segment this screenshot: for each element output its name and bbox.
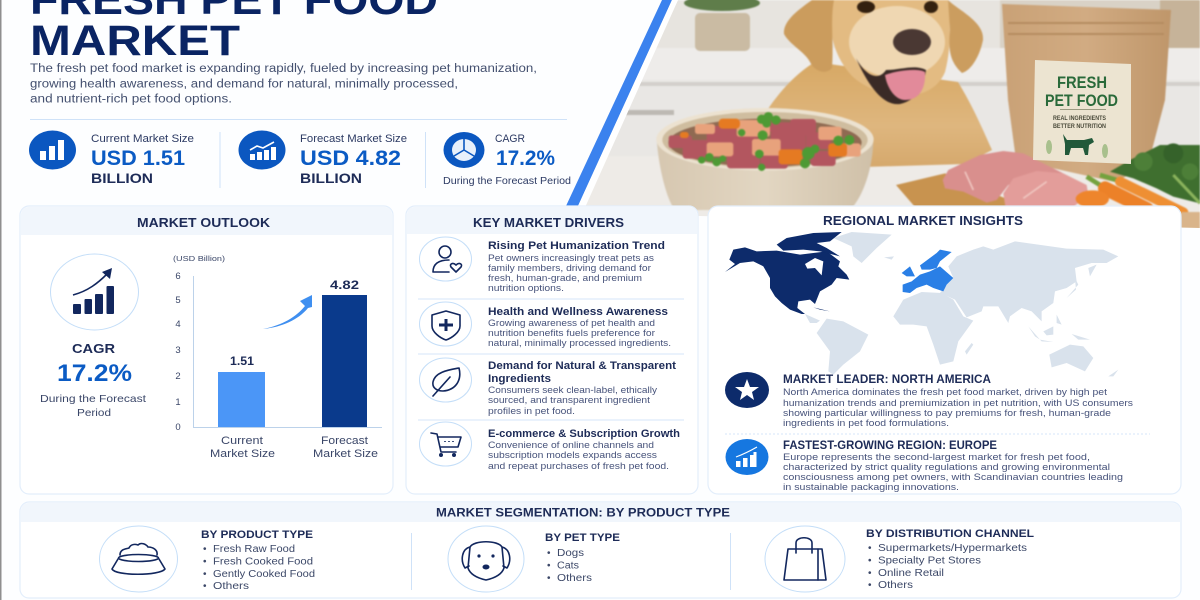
food chunks <box>668 112 862 171</box>
stat: forecast market size: Forecast Market Size <box>300 133 407 145</box>
bar chart: market size: Market Size <box>210 448 275 460</box>
icon: rising chart <box>238 130 286 170</box>
segment: distribution channel: • <box>868 580 872 591</box>
segment: pet type: • <box>547 573 551 584</box>
segment: pet type: BY PET TYPE <box>545 532 620 544</box>
stat: CAGR: CAGR <box>495 133 525 145</box>
driver: health and wellness: natural, minimally processed ingredients. <box>488 338 671 349</box>
segment: distribution channel <box>765 526 1034 592</box>
title <box>30 0 438 65</box>
bar chart: market size: Market Size <box>313 448 378 460</box>
heading: key market drivers: KEY MARKET DRIVERS <box>473 215 624 230</box>
icon: person with heart <box>420 237 472 281</box>
diagonal white and blue stripe <box>566 0 678 212</box>
panel: market outlook <box>20 206 393 494</box>
arrow: growth <box>263 295 312 329</box>
icon: rising bars <box>726 439 768 475</box>
panel: market segmentation <box>20 502 1181 598</box>
panel: regional market insights <box>708 206 1181 494</box>
segment: product type: Others <box>213 581 249 592</box>
icon: shield with cross <box>420 302 472 346</box>
driver: health and wellness: nutrition benefits fuels preference for <box>488 328 655 339</box>
driver: e-commerce: Convenience of online channels and <box>488 440 654 451</box>
insight: fastest-growing region: consciousness among pet owners, with Scandinavian countries leading <box>783 472 1123 483</box>
segment: distribution channel: Specialty Pet Stores <box>878 556 981 566</box>
panel: key market drivers <box>406 206 698 494</box>
heading: market segmentation: MARKET SEGMENTATION: BY PRODUCT TYPE <box>436 506 730 520</box>
stat: CAGR: 17.2% <box>496 147 555 170</box>
icon: food bowl <box>100 526 178 592</box>
map: North America <box>725 232 849 314</box>
segment: distribution channel: BY DISTRIBUTION CHANNEL <box>866 528 1034 540</box>
insight: market leader <box>725 372 1133 429</box>
icon: star <box>725 372 769 408</box>
bar: forecast <box>322 295 367 427</box>
stat: CAGR <box>443 132 571 187</box>
driver: natural ingredients: profiles in pet food. <box>488 406 575 417</box>
segment: distribution channel: • <box>868 543 872 554</box>
bar chart: market size: 0 <box>175 422 181 433</box>
CAGR callout <box>40 341 146 419</box>
driver: e-commerce <box>420 422 680 472</box>
stat: forecast market size: USD 4.82 <box>300 147 401 170</box>
bar chart: market size: 5 <box>175 295 181 306</box>
driver: health and wellness <box>420 302 671 349</box>
stat: forecast market size <box>238 130 407 186</box>
driver: humanization: nutrition options. <box>488 283 564 294</box>
stat: forecast market size: BILLION <box>300 170 362 186</box>
segment: distribution channel: Online Retail <box>878 568 944 579</box>
stat: current market size: USD 1.51 <box>91 147 185 170</box>
bar chart: market size: Forecast <box>321 435 368 447</box>
driver: humanization: fresh, human-grade, and premium <box>488 273 642 284</box>
bar chart: market size: 3 <box>175 345 181 356</box>
icon: bar chart <box>29 130 76 170</box>
insight: market leader: humanization trends and premiumization in pet nutrition, with US consumers <box>783 398 1133 409</box>
title: MARKET <box>30 17 240 65</box>
driver: e-commerce: subscription models expands access <box>488 450 657 461</box>
bag label <box>1033 60 1131 164</box>
icon: dog face <box>448 526 524 592</box>
hero photo: dog, bowl of fresh food, product bag <box>570 0 1200 230</box>
segment: distribution channel: Others <box>878 580 913 591</box>
kale and carrots <box>1076 143 1200 212</box>
segment: product type: • <box>203 556 207 568</box>
segment: pet type: • <box>547 560 551 572</box>
map: Europe <box>902 250 953 293</box>
bar chart: market size <box>173 254 382 460</box>
bag label: BETTER NUTRITION <box>1053 123 1106 130</box>
bag label: FRESH <box>1057 73 1107 92</box>
bar: current <box>218 372 265 427</box>
bowl of fresh food <box>656 108 874 210</box>
intro paragraph: and nutrient-rich pet food options. <box>30 94 232 106</box>
stat: current market size: BILLION <box>91 170 153 186</box>
segment: pet type: • <box>547 548 551 559</box>
segment: product type: • <box>203 581 207 592</box>
bar chart: market size: Current <box>221 435 263 447</box>
segment: product type: • <box>203 544 207 555</box>
cutting board with meat <box>896 150 1088 206</box>
driver: humanization: Rising Pet Humanization Trend <box>488 240 665 252</box>
driver: natural ingredients <box>420 358 676 417</box>
icon: pie chart <box>444 132 484 168</box>
segment: pet type <box>448 526 620 592</box>
driver: humanization: family members, driving demand for <box>488 263 651 274</box>
bar chart: market size: 4.82 <box>330 278 359 292</box>
insight: fastest-growing region: characterized by strict quality regulations and growing environmental <box>783 462 1110 473</box>
segment: product type: Fresh Raw Food <box>213 544 295 555</box>
driver: natural ingredients: Consumers seek clean-label, ethically <box>488 385 657 396</box>
CAGR callout: CAGR <box>72 341 116 356</box>
driver: natural ingredients: Ingredients <box>488 373 551 385</box>
driver: humanization <box>420 237 665 294</box>
bag label: PET FOOD <box>1045 91 1118 110</box>
insight: market leader: ingredients in pet food formulations. <box>783 418 949 429</box>
muzzle <box>849 6 945 78</box>
bar chart: market size: 1 <box>175 397 181 408</box>
heading: market outlook: MARKET OUTLOOK <box>137 215 271 230</box>
driver: natural ingredients: sourced, and transparent ingredient <box>488 395 650 406</box>
CAGR callout: 17.2% <box>57 360 132 387</box>
insight: fastest-growing region <box>726 439 1123 493</box>
segment: distribution channel: Supermarkets/Hypermarkets <box>878 543 1027 554</box>
plant pot <box>684 0 760 51</box>
world map <box>725 232 1118 376</box>
bar chart: market size: (USD Billion) <box>173 254 226 263</box>
insight: market leader: MARKET LEADER: NORTH AMERICA <box>783 374 991 386</box>
intro paragraph: The fresh pet food market is expanding rapidly, fueled by increasing pet humanization, <box>30 63 537 75</box>
dog <box>764 0 992 168</box>
heading: regional market insights: REGIONAL MARKET INSIGHTS <box>823 214 1023 228</box>
bag label: REAL INGREDIENTS <box>1053 115 1107 122</box>
icon: shopping cart <box>420 422 472 466</box>
CAGR callout: Period <box>77 407 111 419</box>
bar chart: market size: 2 <box>175 371 181 382</box>
driver: natural ingredients: Demand for Natural & Transparent <box>488 360 676 372</box>
segment: product type: BY PRODUCT TYPE <box>201 529 313 541</box>
driver: e-commerce: and repeat purchases of fresh pet food. <box>488 461 669 472</box>
bar chart: market size: 6 <box>175 271 181 282</box>
stat: CAGR: During the Forecast Period <box>443 176 571 187</box>
insight: fastest-growing region: in sustainable packaging innovations. <box>783 482 959 493</box>
segment: distribution channel: • <box>868 556 872 566</box>
driver: health and wellness: Growing awareness of pet health and <box>488 318 655 329</box>
segment: product type <box>100 526 315 592</box>
insight: market leader: showing particular willingness to pay premiums for fresh, human-grade <box>783 408 1111 419</box>
CAGR callout: During the Forecast <box>40 393 146 405</box>
segment: pet type: Cats <box>557 560 579 572</box>
stat: current market size: Current Market Size <box>91 133 194 145</box>
segment: pet type: Others <box>557 573 592 584</box>
intro paragraph: growing health awareness, and demand for natural, minimally processed, <box>30 78 458 90</box>
insight: fastest-growing region: FASTEST-GROWING REGION: EUROPE <box>783 440 997 452</box>
segment: product type: Fresh Cooked Food <box>213 556 313 568</box>
intro paragraph <box>30 63 537 106</box>
ears <box>784 0 834 72</box>
insight: market leader: North America dominates the fresh pet food market, driven by high pet <box>783 387 1107 398</box>
driver: e-commerce: E-commerce & Subscription Growth <box>488 428 680 440</box>
icon: shopping bag <box>765 526 845 592</box>
product bag <box>1002 4 1171 182</box>
driver: health and wellness: Health and Wellness Awareness <box>488 306 668 318</box>
driver: humanization: Pet owners increasingly treat pets as <box>488 253 654 264</box>
insight: fastest-growing region: Europe represents the second-largest market for fresh pet food, <box>783 452 1090 463</box>
bar chart: market size: 1.51 <box>230 354 254 368</box>
segment: distribution channel: • <box>868 568 872 579</box>
bar chart: market size: 4 <box>175 319 181 330</box>
segment: product type: Gently Cooked Food <box>213 569 315 580</box>
segment: product type: • <box>203 569 207 580</box>
icon: leaf <box>420 358 472 402</box>
map: rest of world <box>805 232 1118 376</box>
icon: growth chart <box>50 254 138 330</box>
segment: pet type: Dogs <box>557 548 584 559</box>
stat: current market size <box>29 130 194 186</box>
